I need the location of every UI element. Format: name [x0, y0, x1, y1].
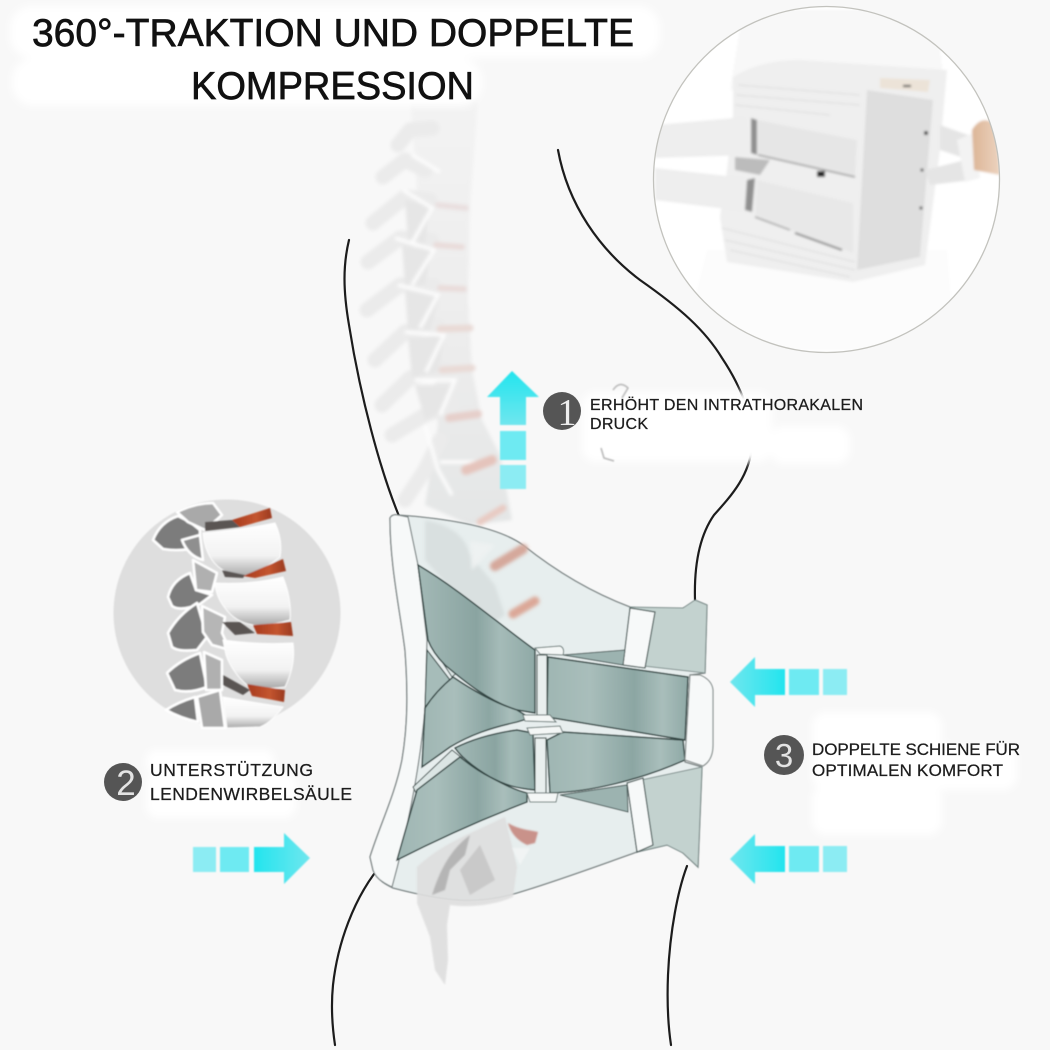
- callout 2: [104, 760, 352, 804]
- callout 3: [764, 735, 1020, 780]
- stray retouch marks near callout 1: [601, 384, 628, 461]
- title: KOMPRESSION: [191, 65, 474, 108]
- badge 2: [104, 763, 142, 803]
- grey backdrop circle: [114, 500, 340, 726]
- badge 3: 3: [775, 737, 793, 774]
- back brace: [370, 515, 713, 985]
- right leg contour: [668, 866, 687, 1045]
- title: [32, 12, 634, 108]
- callout 3 text: OPTIMALEN KOMFORT: [812, 761, 1003, 780]
- upper right strap: [547, 657, 688, 740]
- lower left strap: [397, 757, 527, 860]
- back panel side strips: [626, 600, 707, 673]
- inset photo: brace on torso: [650, 0, 1005, 360]
- left leg contour: [332, 874, 374, 1045]
- front contour: [558, 150, 752, 600]
- brace body: [370, 515, 707, 900]
- small strap wedges: [563, 650, 625, 665]
- badge 2: 2: [116, 764, 136, 803]
- arrow: compression from lower right: [730, 834, 847, 884]
- middle left strap: [422, 677, 530, 767]
- upper left strap: [418, 565, 535, 713]
- lumbar vertebrae seen through brace: [425, 520, 535, 625]
- body outline: [332, 150, 752, 1045]
- pelvis bone: [417, 817, 538, 985]
- white pull tab: [685, 675, 713, 766]
- arrow: upward traction: [487, 371, 539, 489]
- callout 2 text: UNTERSTÜTZUNG: [150, 760, 313, 780]
- plastic buckles: [523, 646, 564, 802]
- lower middle strap: [455, 730, 535, 790]
- callout 1 text: ERHÖHT DEN INTRATHORAKALEN: [590, 396, 863, 414]
- callout 1 text: [590, 396, 863, 433]
- badge 3: [764, 735, 804, 775]
- callout 2 text: LENDENWIRBELSÄULE: [150, 784, 352, 804]
- callout 2 text: [150, 760, 352, 804]
- badge 1: [543, 392, 581, 434]
- callout 3 text: [812, 740, 1020, 780]
- text backing blotches: [10, 6, 1017, 835]
- back contour: [344, 240, 399, 516]
- lumbar spine close-up: [114, 500, 340, 728]
- lower right strap: [547, 732, 685, 793]
- badge 1: 1: [558, 392, 576, 434]
- lower left triangles: [425, 650, 450, 707]
- centre vertical guide: [535, 655, 547, 793]
- callout 1: [543, 392, 863, 434]
- white left panel: [370, 515, 427, 887]
- arrow: compression from left: [193, 833, 310, 884]
- callout 3 text: DOPPELTE SCHIENE FÜR: [812, 740, 1020, 759]
- title: 360°-TRAKTION UND DOPPELTE: [32, 12, 634, 55]
- callout 1 text: DRUCK: [590, 416, 648, 433]
- upper spine illustration: [367, 100, 512, 525]
- arrow: compression from upper right: [730, 657, 847, 707]
